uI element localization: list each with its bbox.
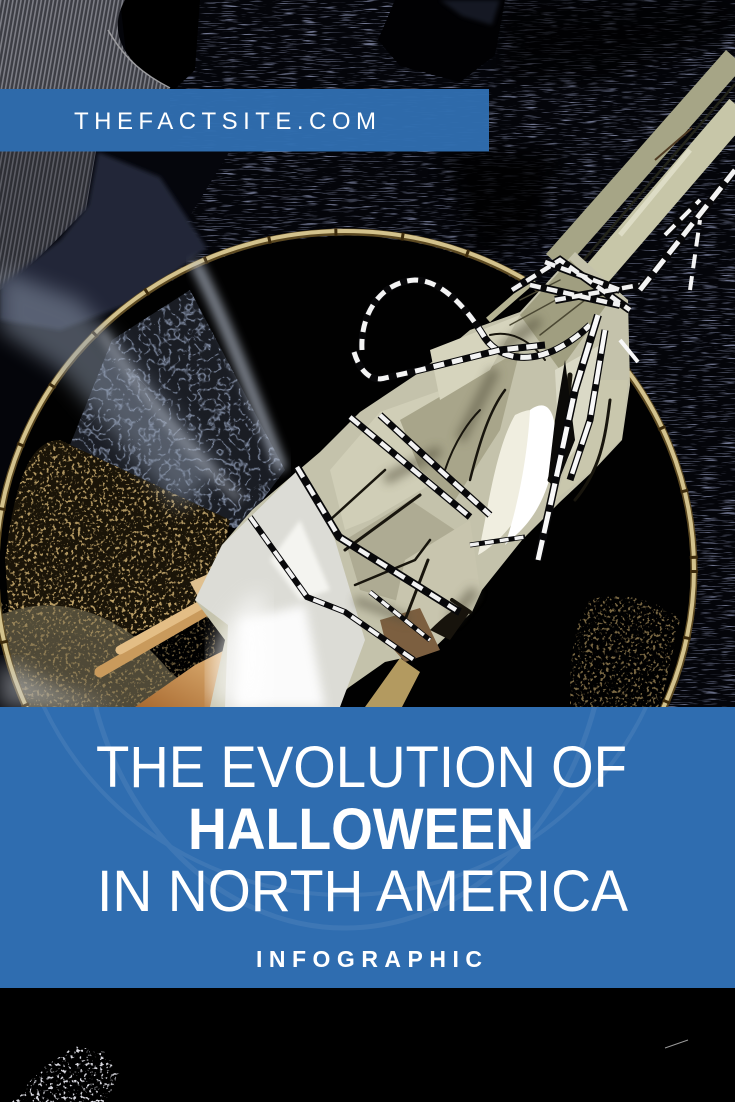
title panel	[0, 707, 735, 988]
gold rim	[0, 228, 698, 707]
black rock at top	[378, 0, 505, 82]
title line 1: THE EVOLUTION OF	[96, 735, 627, 800]
twine along stem	[640, 170, 735, 290]
faint bowl showing through	[42, 707, 648, 930]
bowl interior	[0, 236, 690, 707]
engraved metal and gold texture	[0, 285, 685, 707]
feather top left	[0, 0, 170, 290]
soft shadow folds	[355, 320, 540, 620]
twine	[250, 170, 735, 660]
title line 2: HALLOWEEN	[188, 797, 534, 862]
bundle silhouette	[195, 252, 630, 707]
twine binding lines	[250, 415, 525, 660]
smoke over bundle	[211, 590, 268, 707]
gaps of black between folded leaves	[548, 360, 575, 490]
bottom black rock	[10, 1040, 688, 1102]
brass bowl	[0, 228, 698, 707]
top banner	[0, 89, 489, 152]
burnt lower stems	[100, 560, 420, 707]
sage bundle: leaves	[100, 252, 630, 707]
hanging twine strands	[538, 315, 638, 560]
title line 3: IN NORTH AMERICA	[97, 859, 628, 924]
site name: THEFACTSITE.COM	[74, 108, 376, 135]
twine knot	[512, 260, 640, 310]
bright white leaf zones near embers	[195, 468, 365, 707]
haze: blue grey cloth	[0, 152, 207, 330]
twine loop	[354, 280, 590, 379]
leaf shadow creases	[330, 280, 610, 620]
subtitle: INFOGRAPHIC	[256, 946, 482, 972]
sage stem	[488, 58, 735, 320]
mid leaves	[330, 392, 440, 530]
smoke trails	[0, 262, 282, 707]
